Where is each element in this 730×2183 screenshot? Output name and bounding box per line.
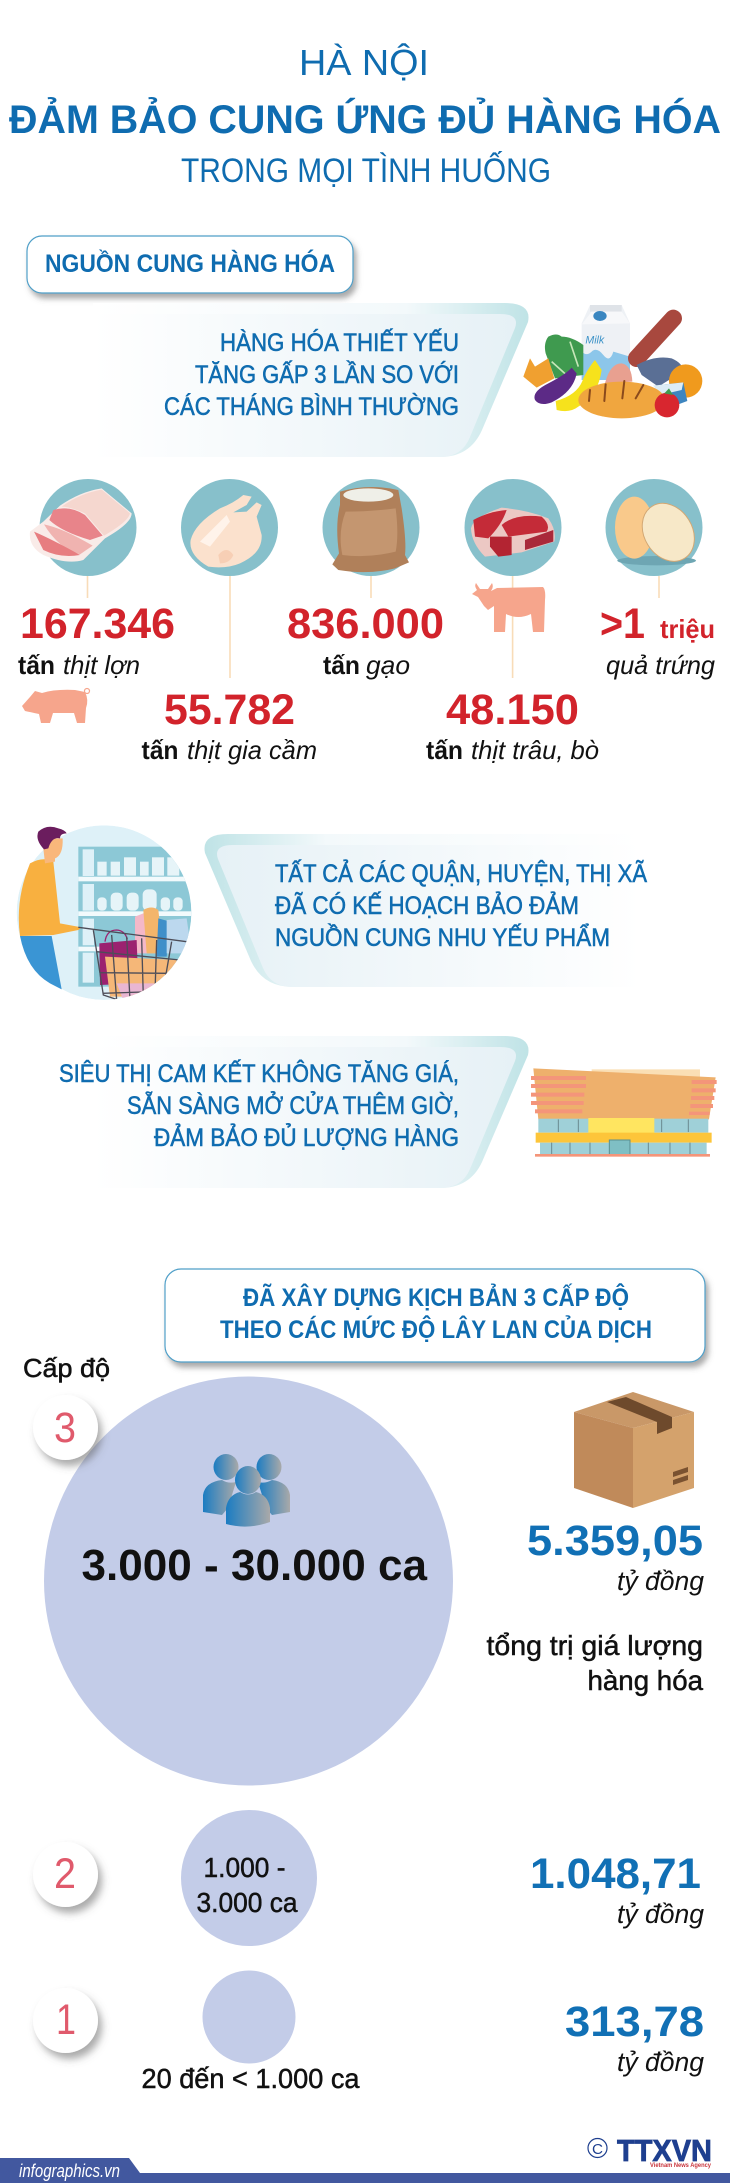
heading: three-level scenario (165, 1269, 705, 1362)
panel: districts: TẤT CẢ CÁC QUẬN, HUYỆN, THỊ XÃ (275, 858, 647, 888)
level 3 circle (44, 1376, 453, 1786)
value: level 1: 313,78 (565, 1998, 704, 2046)
text: total value: hàng hóa (588, 1665, 703, 1696)
stat: rice: 836.000 (287, 600, 444, 648)
stat: eggs (600, 600, 716, 680)
title: HÀ NỘI (299, 42, 429, 83)
stat: rice (287, 600, 444, 680)
title: ĐẢM BẢO CUNG ỨNG ĐỦ HÀNG HÓA (9, 96, 721, 142)
stat: eggs: quả trứng (606, 650, 716, 680)
stat: poultry: thịt gia cầm (187, 735, 317, 765)
stat: eggs: >1 (600, 600, 645, 648)
panel: supermarkets: ĐẢM BẢO ĐỦ LƯỢNG HÀNG (154, 1122, 459, 1152)
icon: people (203, 1454, 290, 1527)
panel: supermarkets: SIÊU THỊ CAM KẾT KHÔNG TĂNG GIÁ, (59, 1059, 459, 1088)
label: level: Cấp độ (23, 1353, 110, 1383)
panel: supermarkets (59, 1036, 529, 1188)
stat: rice: gạo (366, 650, 410, 680)
icon: rice sack (322, 479, 420, 576)
badge: level 1 (33, 1988, 98, 2053)
level 1 circle (202, 1970, 296, 2064)
value: level 3 (527, 1517, 704, 1596)
badge: level 2: 2 (54, 1850, 76, 1898)
value: level 3: tỷ đồng (617, 1566, 704, 1596)
footer bar: infographics.vn (19, 2161, 120, 2181)
panel: districts: NGUỒN CUNG NHU YẾU PHẨM (275, 922, 610, 952)
heading: supply of goods: NGUỒN CUNG HÀNG HÓA (45, 248, 335, 278)
stat: poultry (142, 686, 317, 765)
icon: food group (523, 305, 702, 418)
illustration: shopper (17, 825, 195, 1002)
logo: TTXVN: TTXVN (617, 2133, 712, 2168)
icon: pig (22, 688, 90, 723)
panel: essential goods: HÀNG HÓA THIẾT YẾU (220, 328, 459, 357)
level 3 circle: 3.000 - 30.000 ca (82, 1541, 428, 1590)
stat: eggs: triệu (660, 614, 715, 644)
panel: essential goods (93, 303, 529, 457)
icon: chicken (181, 479, 278, 576)
icon: cardboard box (574, 1392, 694, 1508)
value: level 2 (530, 1850, 704, 1929)
stat: poultry: tấn (142, 735, 178, 765)
level 2 circle: 1.000 - (204, 1852, 286, 1883)
stat: buffalo and beef: tấn (426, 735, 463, 765)
stat: poultry: 55.782 (164, 686, 295, 734)
icon: beef (464, 479, 562, 576)
logo: TTXVN: Vietnam News Agency (650, 2162, 711, 2169)
badge: level 2 (33, 1842, 98, 1907)
title (9, 42, 721, 190)
heading: three-level scenario: ĐÃ XÂY DỰNG KỊCH BẢN 3 CẤP ĐỘ (243, 1282, 629, 1312)
footer bar (0, 2158, 730, 2183)
label: level 1 cases: 20 đến < 1.000 ca (142, 2063, 360, 2094)
panel: essential goods: TĂNG GẤP 3 LẦN SO VỚI (195, 360, 459, 389)
stat: buffalo and beef: thịt trâu, bò (471, 735, 599, 765)
icon: pork (30, 479, 136, 576)
text: total value (486, 1630, 703, 1696)
text: total value: tổng trị giá lượng (486, 1630, 703, 1661)
heading: supply of goods (27, 236, 353, 293)
icon: eggs (606, 479, 705, 576)
stat: pork: tấn (18, 650, 55, 680)
stat: pork: thịt lợn (63, 650, 140, 680)
badge: level 3: 3 (54, 1404, 76, 1452)
value: level 3: 5.359,05 (527, 1517, 703, 1565)
logo: TTXVN: C (592, 2141, 603, 2158)
value: level 1: tỷ đồng (617, 2047, 704, 2077)
value: level 2: 1.048,71 (530, 1850, 701, 1898)
stat: buffalo and beef: 48.150 (446, 686, 579, 734)
stat: pork (18, 600, 175, 680)
stat: pork: 167.346 (20, 600, 175, 648)
connector lines (88, 576, 659, 678)
title: TRONG MỌI TÌNH HUỐNG (181, 151, 551, 190)
value: level 2: tỷ đồng (617, 1899, 704, 1929)
panel: districts: ĐÃ CÓ KẾ HOẠCH BẢO ĐẢM (275, 890, 579, 920)
panel: districts (204, 834, 647, 987)
value: level 1 (565, 1998, 704, 2077)
level 2 circle (181, 1810, 317, 1946)
badge: level 1: 1 (56, 1996, 76, 2044)
panel: supermarkets: SẴN SÀNG MỞ CỬA THÊM GIỜ, (127, 1090, 459, 1120)
level 2 circle: 3.000 ca (196, 1887, 298, 1918)
badge: level 3 (33, 1395, 98, 1460)
stat: rice: tấn (323, 650, 360, 680)
illustration: supermarket building (531, 1068, 717, 1157)
icon: food group: Milk (585, 335, 605, 347)
icon: cow (472, 583, 545, 632)
heading: three-level scenario: THEO CÁC MỨC ĐỘ LÂY LAN CỦA DỊCH (220, 1314, 652, 1344)
panel: essential goods: CÁC THÁNG BÌNH THƯỜNG (164, 392, 459, 421)
stat: buffalo and beef (426, 686, 599, 765)
